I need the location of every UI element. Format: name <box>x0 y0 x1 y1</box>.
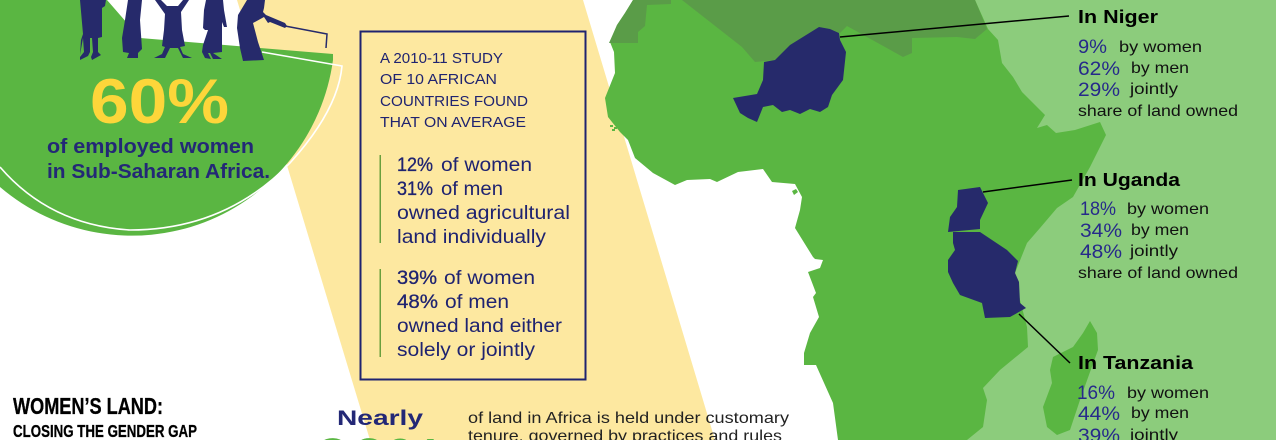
Western Sahara and Morocco, darker green <box>609 0 671 43</box>
women percent: 9% <box>1078 37 1107 58</box>
study intro <box>380 51 528 131</box>
stat group: individually <box>397 155 570 248</box>
islands <box>610 125 798 195</box>
title line 1: WOMEN’S LAND: <box>13 393 163 419</box>
joint percent: 48% <box>1080 242 1122 263</box>
Sahara region, darker green <box>682 0 987 62</box>
continent <box>605 0 1106 440</box>
Madagascar <box>1043 321 1098 435</box>
map of Africa <box>605 0 1106 440</box>
yellow diagonal band <box>237 0 715 440</box>
disc <box>0 0 333 236</box>
study box <box>360 32 586 380</box>
Tanzania stats <box>1077 352 1209 440</box>
of women: of women <box>444 268 535 289</box>
caption line 2: in Sub-Saharan Africa. <box>47 161 270 183</box>
figure 5 with hoe <box>237 0 287 61</box>
figure 1 <box>80 0 106 60</box>
Uganda <box>948 187 988 232</box>
heading: In Tanzania <box>1078 352 1194 373</box>
of men: of men <box>445 292 509 313</box>
owned land either: owned land either <box>397 316 563 337</box>
description line 1: of land in Africa is held under customary <box>468 410 789 427</box>
Niger <box>733 27 846 122</box>
share of land owned: share of land owned <box>1078 265 1238 282</box>
by women: by women <box>1119 39 1202 56</box>
women percent: 18% <box>1080 199 1116 220</box>
men percent: 44% <box>1078 404 1120 425</box>
owned agricultural: owned agricultural <box>397 203 570 224</box>
women silhouettes <box>80 0 327 61</box>
leader line: Tanzania <box>1019 314 1070 363</box>
figure 3 <box>154 0 192 58</box>
figure 2 <box>122 0 142 58</box>
of women: of women <box>441 155 532 176</box>
caption <box>47 136 270 183</box>
joint percent: 29% <box>1078 80 1120 101</box>
caption line 1: of employed women <box>47 136 254 158</box>
heading: In Niger <box>1078 6 1158 27</box>
leader line: Uganda <box>983 180 1072 192</box>
intro line 2: OF 10 AFRICAN <box>380 72 497 88</box>
39 percent: 39% <box>397 268 437 289</box>
box border <box>360 32 586 380</box>
60 percent figure: 60% <box>90 67 229 137</box>
men percent: 62% <box>1078 59 1120 80</box>
men percent: 34% <box>1080 221 1122 242</box>
by men: by men <box>1131 222 1189 239</box>
heading: In Uganda <box>1078 169 1181 190</box>
by women: by women <box>1127 201 1209 218</box>
jointly: jointly <box>1129 243 1178 260</box>
by women: by women <box>1127 385 1209 402</box>
women percent: 16% <box>1077 383 1115 404</box>
by men: by men <box>1131 60 1189 77</box>
by men: by men <box>1131 405 1189 422</box>
intro line 4: THAT ON AVERAGE <box>380 115 526 131</box>
share of land owned: share of land owned <box>1078 103 1238 120</box>
accent bar 2 <box>380 269 381 357</box>
intro line 1: A 2010-11 STUDY <box>380 51 503 67</box>
stat group: solely or jointly <box>397 268 563 361</box>
48 percent: 48% <box>397 292 438 313</box>
12 percent: 12% <box>397 155 433 176</box>
ocean background: light green panel <box>960 0 1276 440</box>
Uganda stats <box>1078 169 1238 282</box>
customary tenure callout <box>315 407 789 440</box>
jointly: jointly <box>1129 81 1178 98</box>
accent bar 1 <box>380 155 381 243</box>
solely or jointly: solely or jointly <box>397 340 536 361</box>
31 percent: 31% <box>397 179 433 200</box>
figure 4 <box>202 0 227 59</box>
land individually: land individually <box>397 227 547 248</box>
hoe <box>285 26 327 48</box>
Tanzania <box>948 232 1026 318</box>
report title <box>13 393 197 440</box>
Niger stats <box>1078 6 1238 120</box>
intro line 3: COUNTRIES FOUND <box>380 94 528 110</box>
green disc panel: employed women <box>0 0 342 236</box>
leader line: Niger <box>840 16 1069 37</box>
white outline arc <box>0 52 342 230</box>
Nearly: Nearly <box>337 407 423 430</box>
of men: of men <box>441 179 503 200</box>
